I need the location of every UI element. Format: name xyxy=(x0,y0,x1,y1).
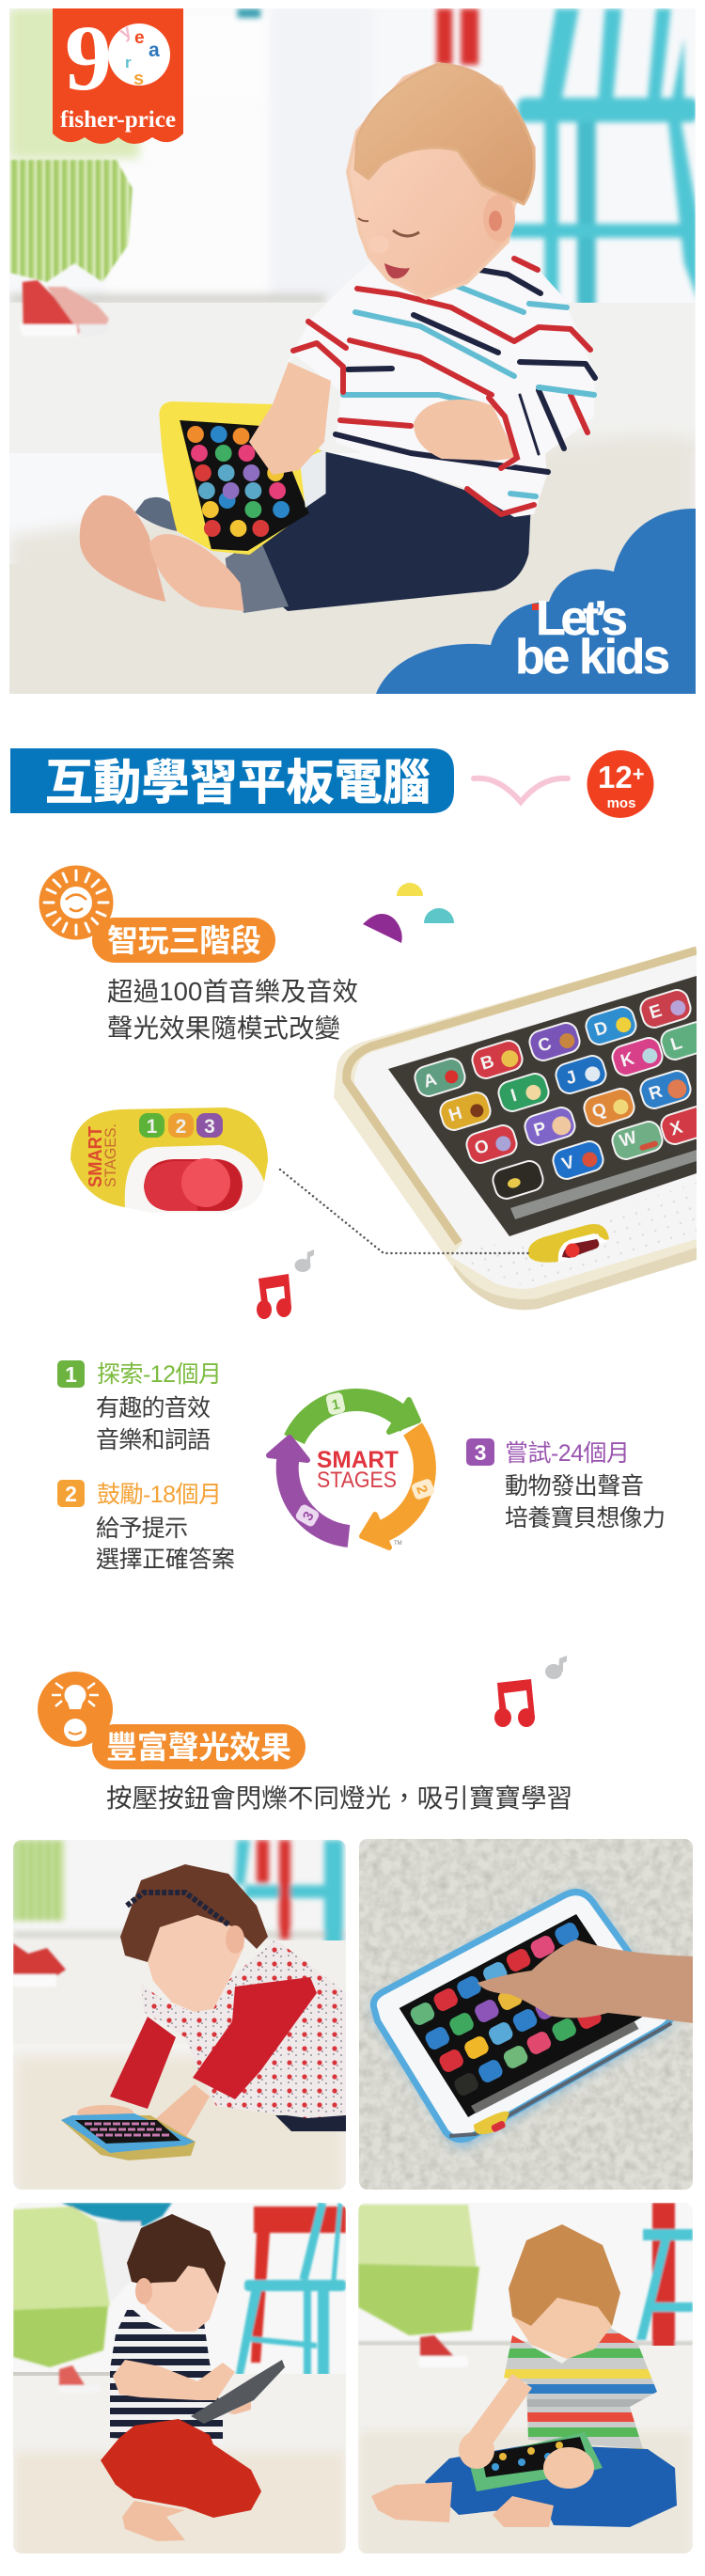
age badge 12+ mos xyxy=(587,750,654,818)
icon: gray music note xyxy=(295,1249,314,1272)
badge 1: 1 xyxy=(65,1362,77,1387)
Fisher-Price 90 years logo: r xyxy=(125,54,132,71)
badge 2: 2 xyxy=(65,1482,77,1506)
right sleeve xyxy=(489,387,594,468)
red sneakers xyxy=(19,280,110,338)
badge 3: 3 xyxy=(475,1440,486,1465)
stage 2 text: 選擇正確答案 xyxy=(96,1547,235,1573)
Fisher-Price 90 years logo xyxy=(53,6,183,144)
red sneakers xyxy=(13,1943,66,1987)
head xyxy=(512,2298,612,2359)
foot xyxy=(122,2501,185,2541)
badge 1 xyxy=(57,1360,85,1388)
hero photo: baby playing with tablet xyxy=(9,6,698,695)
red pants xyxy=(101,2419,261,2518)
hands xyxy=(77,2105,133,2115)
dress xyxy=(141,1940,346,2118)
blue cloud xyxy=(376,509,696,694)
smart stages cycle diagram: 3 xyxy=(300,1509,318,1524)
feet xyxy=(371,2482,452,2522)
stage switch close-up: 3 xyxy=(204,1116,215,1138)
smart stages cycle diagram xyxy=(269,1391,435,1547)
baby head xyxy=(348,64,534,298)
product photo: tablet close-up: D xyxy=(592,1018,610,1041)
small stage switch xyxy=(528,1224,609,1263)
product photo: tablet close-up: I xyxy=(509,1086,519,1107)
right hand xyxy=(414,400,517,461)
icon: gray music note xyxy=(545,1656,567,1679)
description text: 超過100首音樂及音效 xyxy=(107,977,358,1006)
product photo: tablet close-up: Q xyxy=(589,1099,609,1123)
age badge 12+ mos: mos xyxy=(607,795,635,811)
pill label: 豐富聲光效果 xyxy=(106,1730,291,1765)
description text xyxy=(107,977,358,1043)
product photo: tablet close-up: W xyxy=(618,1128,639,1152)
arm and hand xyxy=(113,2360,235,2400)
hero background, blanket, chair, tablet and legs xyxy=(9,8,698,695)
stage switch xyxy=(474,2112,509,2134)
blue shorts xyxy=(425,2444,677,2527)
stage 2 text: 鼓勵-18個月 xyxy=(97,1482,222,1508)
head xyxy=(138,2266,218,2332)
tablet xyxy=(191,2360,285,2424)
pill label xyxy=(92,918,275,963)
jeans xyxy=(226,449,530,611)
section heading: 豐富聲光效果 xyxy=(38,1672,306,1769)
pill label: 智玩三階段 xyxy=(107,923,261,958)
icon: red music note xyxy=(257,1274,291,1319)
keys xyxy=(414,1058,466,1097)
stage 1 text: 有趣的音效 xyxy=(96,1395,211,1422)
pink chevron xyxy=(474,778,568,802)
icon: red music note xyxy=(494,1679,535,1727)
product photo: tablet close-up: C xyxy=(536,1034,555,1057)
product photo: tablet close-up: B xyxy=(478,1052,496,1075)
smart stages cycle diagram: 1 xyxy=(330,1396,341,1414)
badge 3 xyxy=(466,1438,494,1466)
dotted connector xyxy=(280,1170,529,1253)
age badge 12+ mos: 12 xyxy=(598,760,633,794)
section heading: 智玩三階段 xyxy=(39,865,275,963)
Fisher-Price 90 years logo: a xyxy=(149,39,160,61)
Fisher-Price 90 years logo: e xyxy=(134,28,145,48)
photo: toddler in red pants with tablet xyxy=(13,2203,346,2565)
product photo: tablet close-up: H xyxy=(446,1104,464,1126)
Let's be kids slogan xyxy=(515,591,670,684)
product photo: tablet close-up: X xyxy=(667,1118,685,1140)
stage switch close-up: STAGES. xyxy=(102,1123,119,1187)
product photo: tablet close-up: V xyxy=(559,1153,577,1175)
description text: 聲光效果隨模式改變 xyxy=(107,1013,340,1043)
product photo: tablet close-up: P xyxy=(531,1119,549,1141)
product photo: tablet close-up: L xyxy=(668,1033,685,1055)
stage 2 text xyxy=(57,1480,235,1573)
stage switch close-up: 1 xyxy=(147,1116,158,1138)
product photo: tablet close-up: J xyxy=(563,1067,579,1089)
stage 3 text: 嘗試-24個月 xyxy=(505,1440,630,1467)
product photo: tablet close-up: R xyxy=(647,1082,666,1105)
feet xyxy=(80,495,243,611)
title banner: 互動學習平板電腦 xyxy=(45,756,431,809)
product photo: tablet close-up: K xyxy=(619,1049,637,1072)
shirt with stripes xyxy=(284,257,595,517)
stage 3 text xyxy=(466,1438,666,1531)
Let's be kids slogan: Let’s xyxy=(536,591,628,646)
Fisher-Price 90 years logo: s xyxy=(133,69,144,89)
photo: girl touching tablet xyxy=(13,1840,346,2199)
icon: light bulb face xyxy=(38,1672,113,1747)
product photo: tablet close-up: E xyxy=(647,1001,665,1024)
red sneakers xyxy=(57,2364,85,2386)
smart stages cycle diagram: 2 xyxy=(413,1484,431,1496)
red sleeves xyxy=(110,2017,176,2109)
product photo: tablet close-up xyxy=(334,947,705,1310)
hand xyxy=(478,1940,693,2023)
stage switch close-up xyxy=(70,1107,268,1213)
stage 1 text: 音樂和詞語 xyxy=(96,1427,211,1453)
hands xyxy=(459,2431,594,2489)
badge 2 xyxy=(57,1480,85,1507)
smart stages cycle diagram: TM xyxy=(394,1541,402,1547)
decorative semicircles xyxy=(363,883,454,943)
Fisher-Price 90 years logo: fisher-price xyxy=(60,107,176,133)
icon: smiling sun face xyxy=(39,865,113,940)
photo: boy with green tablet xyxy=(358,2203,693,2562)
tablet xyxy=(61,2115,196,2160)
left arm xyxy=(469,2374,532,2442)
stage 3 text: 動物發出聲音 xyxy=(505,1473,644,1500)
age badge 12+ mos: + xyxy=(633,762,645,786)
product photo: tablet close-up: O xyxy=(472,1136,492,1159)
red sneakers xyxy=(418,2335,468,2367)
tablet xyxy=(468,2432,603,2491)
smart stages cycle diagram: STAGES xyxy=(317,1468,397,1493)
left forearm and hand xyxy=(249,362,331,475)
stage 1 text xyxy=(57,1360,222,1453)
stage switch close-up: SMART xyxy=(86,1126,106,1187)
pill label xyxy=(92,1724,306,1769)
tablet xyxy=(159,401,326,555)
striped shirt xyxy=(110,2306,223,2444)
hand under tablet xyxy=(228,2400,251,2414)
photo: hand pressing glowing tablet xyxy=(359,1839,693,2190)
description text: 按壓按鈕會閃爍不同燈光，吸引寶寶學習 xyxy=(106,1783,572,1813)
Fisher-Price 90 years logo: 9 xyxy=(65,6,112,110)
stage 2 text: 給予提示 xyxy=(96,1516,188,1542)
keys: A xyxy=(421,1070,440,1092)
stage 1 text: 探索-12個月 xyxy=(97,1361,222,1388)
stage switch close-up: 2 xyxy=(176,1116,186,1138)
smart stages cycle diagram: SMART xyxy=(317,1447,399,1473)
head xyxy=(148,1915,244,2012)
Let's be kids slogan: be kids xyxy=(515,630,670,684)
striped polo xyxy=(504,2326,657,2449)
stage 3 text: 培養寶貝想像力 xyxy=(505,1505,666,1531)
Fisher-Price 90 years logo: y xyxy=(117,22,135,43)
